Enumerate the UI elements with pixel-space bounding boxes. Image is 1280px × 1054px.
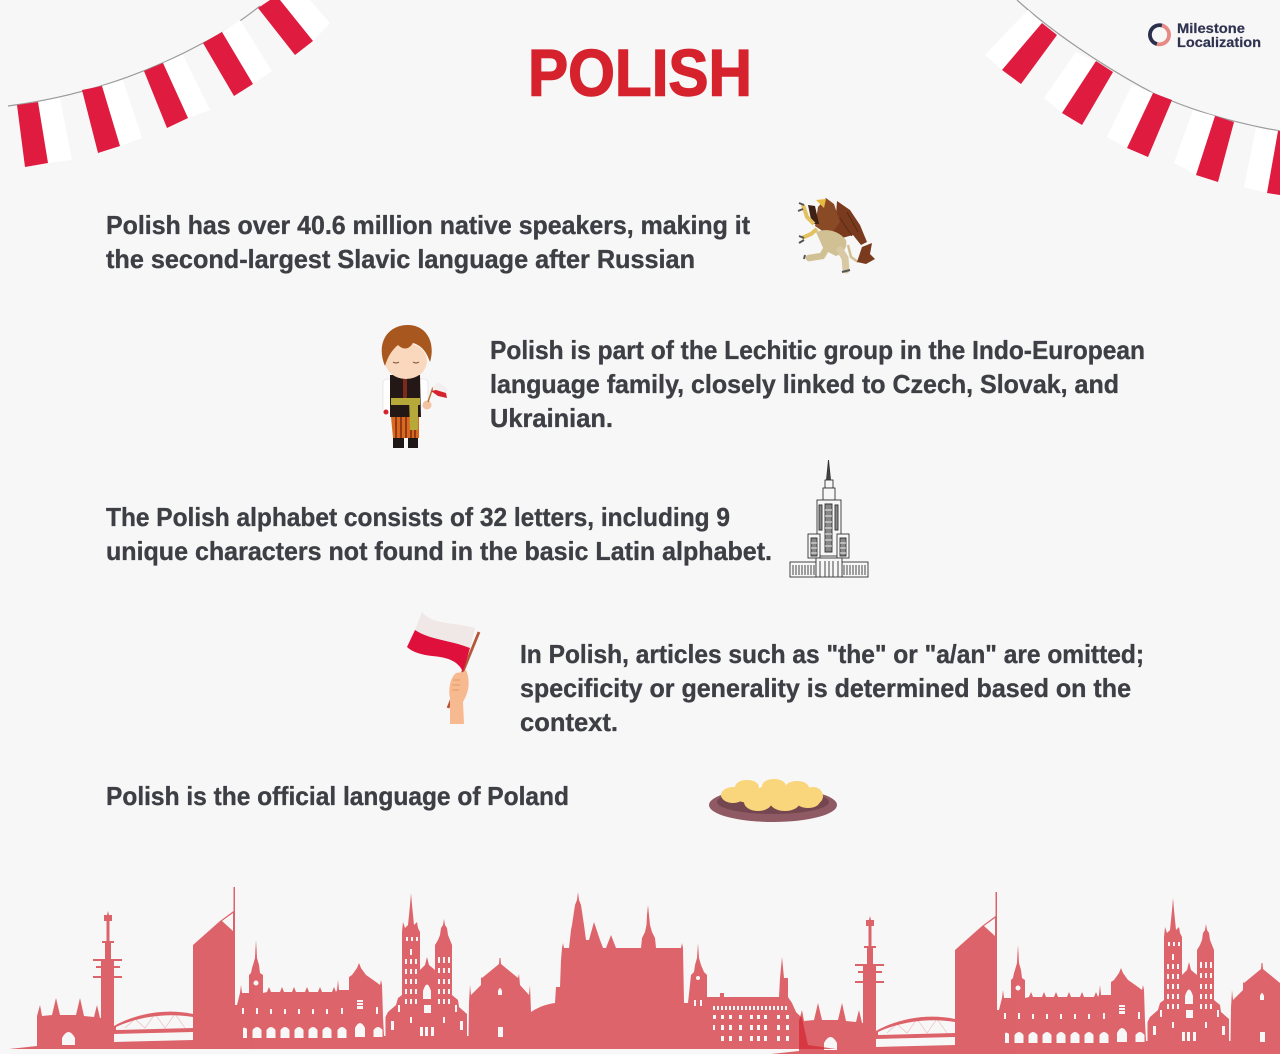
text: articles fact [520, 639, 1144, 737]
icon: Palace of Culture tower [790, 460, 868, 577]
bunting: top right [985, 0, 1280, 195]
text: articles fact: context. [520, 707, 618, 737]
title: POLISH [528, 36, 752, 110]
text: alphabet fact [106, 502, 772, 566]
icon: boy in Polish folk costume [382, 325, 448, 448]
text: native speakers fact: the second-largest Slavic language after Russian [106, 244, 695, 274]
text: articles fact: specificity or generality is determined based on the [520, 673, 1131, 703]
skyline: second panorama [771, 892, 1280, 1054]
text: language family fact: Polish is part of the Lechitic group in the Indo-European [490, 335, 1145, 365]
logo: Milestone Localization [1150, 21, 1261, 50]
text: alphabet fact: The Polish alphabet consists of 32 letters, including 9 [106, 502, 730, 532]
text: alphabet fact: unique characters not found in the basic Latin alphabet. [106, 536, 772, 566]
icon: hand waving Polish flag [407, 612, 479, 724]
text: native speakers fact [106, 210, 750, 274]
text: language family fact [490, 335, 1145, 433]
icon: griffin [798, 198, 875, 272]
text: official language fact: Polish is the official language of Poland [106, 781, 569, 811]
skyline: first panorama [9, 887, 836, 1049]
text: native speakers fact: Polish has over 40.6 million native speakers, making it [106, 210, 750, 240]
text: language family fact: Ukrainian. [490, 403, 613, 433]
icon: plate of pierogi [709, 779, 837, 822]
logo: Milestone Localization: Localization [1177, 35, 1261, 50]
logo: Milestone Localization: Milestone [1177, 21, 1246, 36]
text: articles fact: In Polish, articles such as "the" or "a/an" are omitted; [520, 639, 1144, 669]
bunting: top left [8, 0, 330, 167]
skyline of Polish landmarks [9, 887, 1280, 1054]
text: language family fact: language family, closely linked to Czech, Slovak, and [490, 369, 1119, 399]
